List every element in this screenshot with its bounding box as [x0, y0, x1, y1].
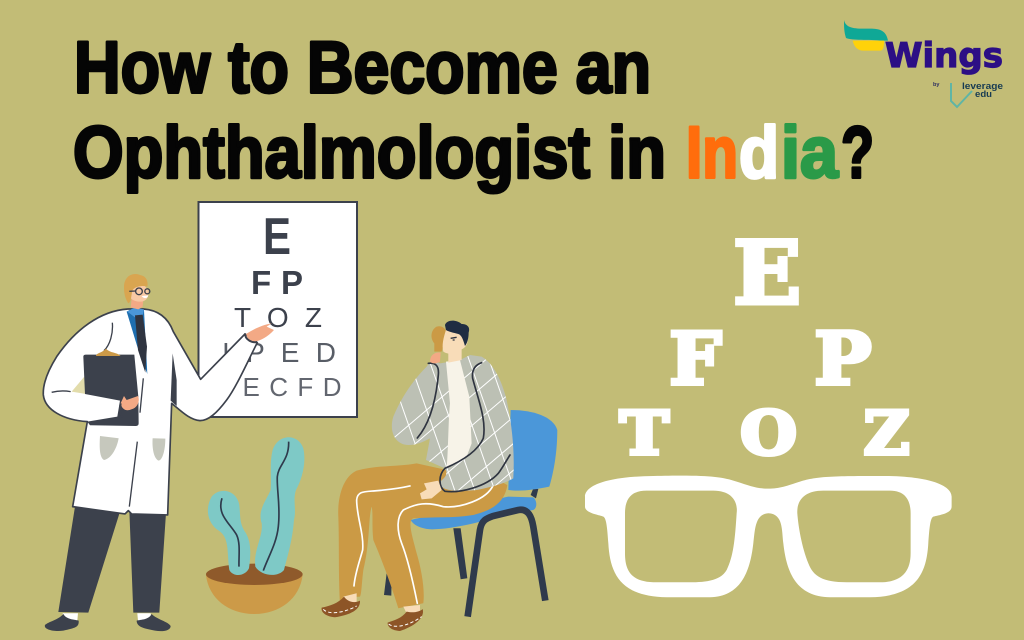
title: ia	[781, 112, 839, 194]
back legs	[384, 528, 467, 596]
neck	[448, 347, 462, 363]
chair	[384, 410, 557, 617]
icon: wing	[844, 20, 888, 51]
eye	[451, 337, 457, 340]
chair and patient	[322, 321, 557, 631]
pockets	[100, 436, 165, 461]
socks and shoes	[45, 613, 171, 631]
eye test letters: P	[814, 317, 872, 402]
shirt and tie	[127, 307, 147, 374]
wrist cuff	[245, 333, 257, 342]
trouser stripes	[354, 485, 493, 603]
eye test letters: O	[740, 399, 797, 469]
backrest	[508, 410, 557, 491]
eye occluder	[432, 326, 447, 352]
jacket check pattern	[394, 356, 514, 491]
pointing hand	[246, 323, 274, 342]
resting hand	[420, 481, 442, 499]
eye test letters: E	[733, 224, 801, 325]
wordmark: Wings	[885, 36, 1003, 76]
leverage edu text	[962, 81, 1003, 100]
eye test letters	[620, 224, 910, 469]
trousers	[338, 463, 507, 608]
soil	[206, 564, 303, 585]
jacket	[392, 355, 514, 492]
leverage edu text: leverage	[962, 81, 1003, 92]
clipboard	[83, 349, 139, 426]
by: by	[933, 82, 940, 88]
eye chart on wall	[198, 202, 357, 417]
jacket outlines	[417, 363, 510, 492]
front frame	[468, 510, 545, 617]
title: How to Become an	[74, 28, 651, 108]
title	[73, 28, 874, 194]
coat shadow under arm	[171, 353, 177, 406]
lab coat	[43, 309, 257, 515]
eye chart on wall: E	[263, 208, 291, 266]
leaf veins	[221, 442, 289, 571]
eye test letters: T	[620, 399, 669, 469]
eye chart on wall: T O Z	[234, 302, 322, 333]
potted plant	[206, 437, 304, 614]
hair	[445, 321, 469, 346]
doctor	[43, 274, 274, 631]
eye test letters: F	[669, 317, 722, 402]
leverage edu text: edu	[975, 89, 992, 100]
title: In	[686, 112, 738, 194]
t-shirt	[446, 360, 472, 468]
eye chart on wall: F P	[251, 264, 303, 301]
face	[443, 330, 468, 354]
eye chart on wall: E C F D	[242, 372, 342, 402]
eye chart on wall: I P E D	[222, 337, 336, 368]
logo: Wings by leverage edu	[844, 20, 1003, 107]
title: ?	[841, 112, 874, 194]
icon: leverage mark	[951, 83, 972, 107]
bowl	[206, 575, 303, 614]
title: Ophthalmologist in	[73, 112, 666, 194]
eyeglasses	[129, 288, 150, 295]
gap under arm	[72, 377, 86, 394]
trousers	[58, 507, 166, 613]
eyeglasses icon	[585, 476, 952, 597]
hand on clipboard	[121, 396, 139, 410]
title: d	[739, 112, 779, 194]
cuff	[120, 403, 123, 417]
raised hand	[430, 352, 441, 363]
leaves	[208, 437, 304, 575]
eye test letters: Z	[864, 399, 910, 469]
head	[124, 274, 150, 309]
coat seams	[52, 323, 143, 507]
patient shoes	[322, 593, 423, 631]
seat	[411, 497, 536, 529]
